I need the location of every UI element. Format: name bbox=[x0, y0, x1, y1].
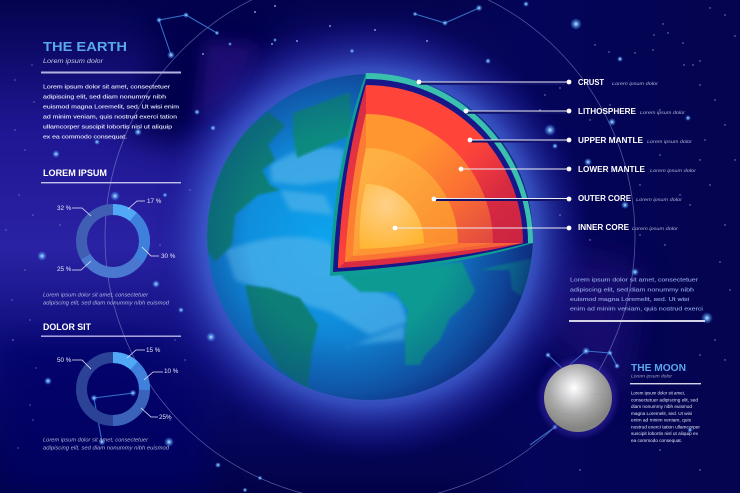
moon text: magna Loremelit, sed. Ut wisi bbox=[631, 411, 692, 416]
intro text: euismod magna Loremelit, sed. Ut wisi enim bbox=[43, 104, 179, 110]
clouds bbox=[225, 147, 408, 350]
heading: lorem ipsum: LOREM IPSUM bbox=[43, 168, 107, 178]
layer: inner core bbox=[360, 184, 424, 249]
rule bbox=[569, 320, 705, 322]
caption: Lorem ipsum dolor sit amet, consectetuer bbox=[43, 292, 148, 298]
description text: euismod magna Loremelit, sed. Ut wisi bbox=[570, 297, 689, 303]
continents bbox=[200, 92, 533, 398]
layer labels: OUTER CORE bbox=[578, 194, 632, 203]
intro text: Lorem ipsum dolor sit amet, consectetuer bbox=[43, 84, 170, 90]
orbit ring bbox=[105, 0, 635, 493]
layer: upper mantle bbox=[338, 85, 523, 268]
donut leaders and labels bbox=[72, 350, 163, 417]
layer: lower mantle bbox=[345, 114, 493, 262]
earth globe bbox=[200, 74, 533, 400]
panel: dolor sit donut: 25% bbox=[159, 414, 172, 421]
moon text: diam nonummy nibh euismod bbox=[631, 404, 693, 409]
description text: Lorem ipsum dolor sit amet, consectetuer bbox=[570, 278, 698, 284]
intro text: ad minim veniam, quis nostrud exerci tation bbox=[43, 114, 177, 120]
layer sublabels: Lorem ipsum dolor bbox=[647, 139, 692, 145]
layer sublabels: Lorem ipsum dolor bbox=[612, 81, 658, 87]
caption: adipiscing elit, sed diam nonummy nibh euismod bbox=[43, 300, 170, 306]
description text bbox=[570, 278, 703, 312]
panel: lorem ipsum donut: 30 % bbox=[161, 253, 176, 260]
intro text: ullamcorper suscipit lobortis nisl ut aliquip bbox=[43, 124, 172, 130]
layer sublabels: Lorem ipsum dolor bbox=[640, 110, 685, 116]
moon text bbox=[631, 390, 701, 443]
callout lines bbox=[393, 80, 571, 230]
layer sublabels: Lorem ipsum dolor bbox=[632, 226, 678, 232]
heading: the moon: THE MOON bbox=[631, 363, 686, 374]
layer sublabels: Lorem ipsum dolor bbox=[650, 168, 696, 174]
donut leaders and labels bbox=[72, 201, 159, 270]
layer labels: CRUST bbox=[578, 78, 604, 87]
background: earth glow bbox=[148, 15, 592, 459]
donut chart 2 bbox=[82, 358, 144, 420]
layer labels: UPPER MANTLE bbox=[578, 136, 644, 145]
layer labels: INNER CORE bbox=[578, 223, 630, 232]
moon text: suscipit lobortis nisl ut aliquip ex bbox=[631, 431, 699, 436]
description text: enim ad minim veniam, quis nostrud exerci bbox=[570, 306, 703, 312]
layer: crust bbox=[330, 73, 533, 276]
layer labels: LITHOSPHERE bbox=[578, 107, 637, 116]
layer: outer core bbox=[353, 148, 458, 256]
panel: the moon bbox=[630, 363, 701, 443]
layer: lithosphere bbox=[333, 79, 528, 272]
rule bbox=[41, 182, 181, 183]
panel: right description bbox=[569, 278, 705, 322]
subtitle: Lorem ipsum dolor bbox=[43, 59, 104, 65]
donut chart 1 bbox=[82, 210, 144, 272]
caption: adipiscing elit, sed diam nonummy nibh euismod bbox=[43, 446, 170, 452]
panel: dolor sit donut: 15 % bbox=[146, 347, 161, 354]
panel: lorem ipsum donut: 32 % bbox=[57, 205, 72, 212]
layer sublabels bbox=[612, 81, 696, 232]
rule bbox=[41, 72, 181, 74]
description text: adipiscing elit, sed diam nonummy nibh bbox=[570, 288, 694, 294]
icon: moon bbox=[539, 359, 617, 437]
heading: the earth: THE EARTH bbox=[43, 39, 127, 54]
intro text: ex ea commodo consequat. bbox=[43, 134, 127, 140]
moon text: consectetuer adipiscing elit, sed bbox=[631, 397, 699, 402]
moon text: enim ad minim veniam, quis bbox=[631, 418, 691, 423]
layer labels: LOWER MANTLE bbox=[578, 165, 646, 174]
layer labels bbox=[578, 78, 646, 232]
earth cross-section bbox=[330, 73, 533, 276]
panel: lorem ipsum donut: 25 % bbox=[57, 266, 72, 273]
caption: Lorem ipsum dolor sit amet, consectetuer bbox=[43, 438, 148, 444]
intro text: adipiscing elit, sed diam nonummy nibh bbox=[43, 94, 166, 100]
layer sublabels: Lorem ipsum dolor bbox=[636, 197, 682, 203]
panel: dolor sit donut bbox=[41, 322, 181, 452]
rule bbox=[41, 336, 181, 337]
constellations bbox=[94, 8, 617, 445]
panel: dolor sit donut: 10 % bbox=[164, 368, 179, 375]
panel: lorem ipsum donut: 17 % bbox=[147, 198, 162, 205]
panel: the earth intro bbox=[41, 39, 181, 140]
moon text: ea commodo consequat. bbox=[631, 438, 682, 443]
subtitle: Lorem ipsum dolor bbox=[631, 374, 673, 378]
intro text bbox=[43, 84, 179, 140]
panel: lorem ipsum donut bbox=[41, 168, 181, 306]
caption bbox=[43, 438, 170, 452]
moon text: nostrud exerci tation ullamcorper bbox=[631, 424, 701, 429]
moon text: Lorem ipsum dolor sit amet, bbox=[631, 390, 685, 396]
panel: dolor sit donut: 50 % bbox=[57, 357, 72, 364]
caption bbox=[43, 292, 170, 306]
rule bbox=[630, 383, 701, 384]
heading: dolor sit: DOLOR SIT bbox=[43, 322, 91, 332]
